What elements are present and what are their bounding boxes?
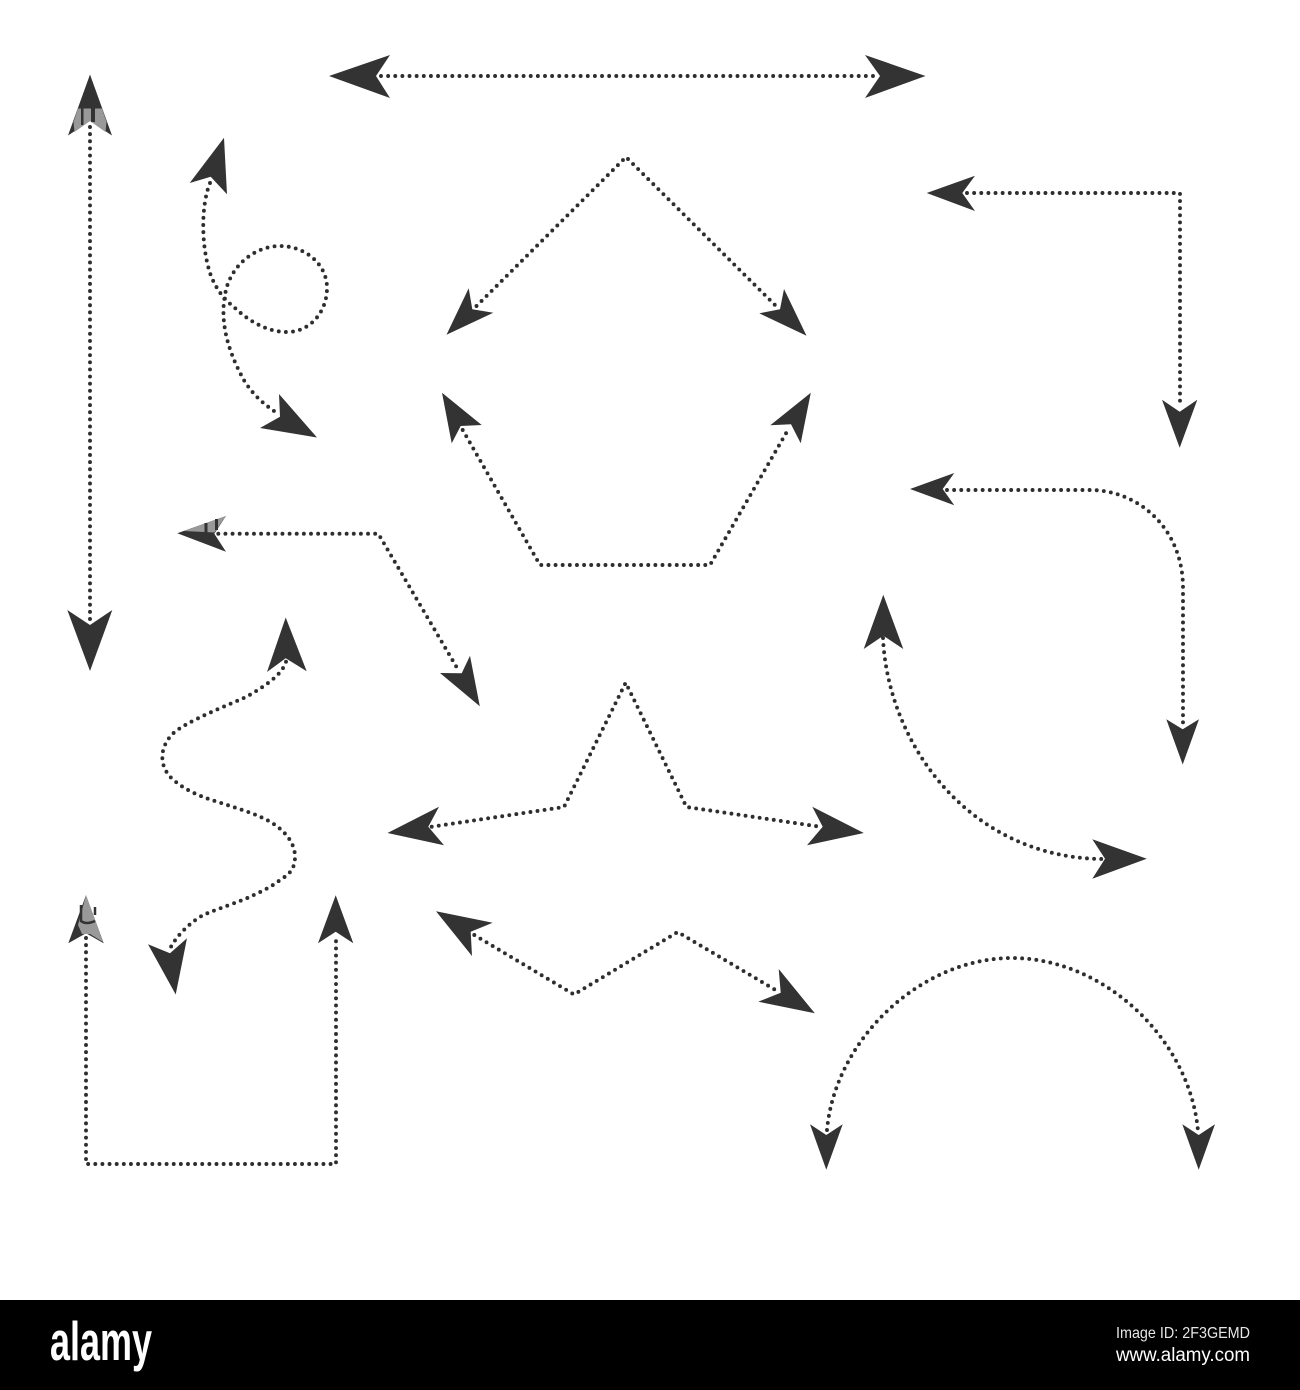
arrow: bent left with diagonal — [177, 516, 480, 706]
arrow: U shape bottom left — [68, 895, 353, 1164]
website: www.alamy.com — [1115, 1345, 1250, 1366]
arrow: curl with loop — [190, 138, 327, 437]
arrow: right angle top right — [927, 176, 1197, 448]
arrow: pentagon upper pair — [446, 157, 806, 336]
arrow: zigzag — [436, 911, 815, 1013]
arrow: quarter curve right — [864, 595, 1147, 879]
arrow: rounded corner right — [910, 473, 1199, 764]
footer band — [0, 1300, 1300, 1390]
arrow: left vertical double-headed — [67, 74, 112, 671]
arrow: semicircle arc — [810, 958, 1215, 1170]
arrow: star outline — [388, 683, 864, 845]
arrow: top horizontal double-headed — [329, 55, 926, 98]
logo: alamy: alamy — [50, 1310, 152, 1372]
image id: Image ID: 2F3GEMD — [1116, 1325, 1250, 1342]
arrow: wavy S curve — [148, 618, 307, 994]
arrow: pentagon lower pair — [442, 393, 811, 565]
